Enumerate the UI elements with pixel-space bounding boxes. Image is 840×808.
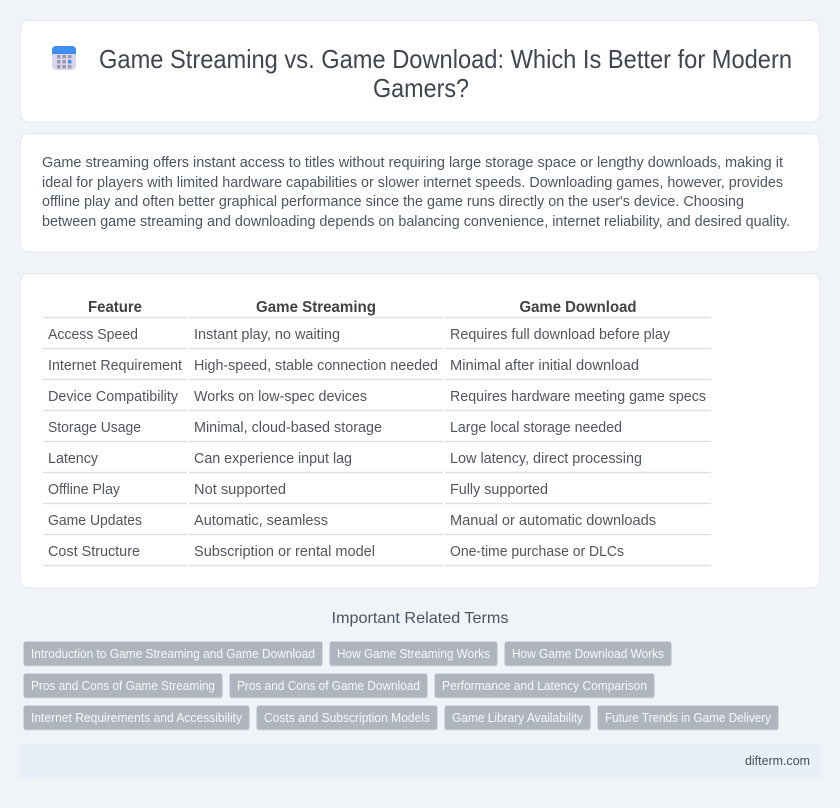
tag: Internet Requirements and Accessibility — [31, 710, 243, 725]
row: game updates — [48, 513, 656, 529]
row: latency — [48, 451, 642, 467]
panel: introduction text — [20, 134, 820, 252]
tag — [598, 706, 778, 730]
row: storage usage: Minimal, cloud-based storage — [194, 420, 382, 436]
row: offline play: Offline Play — [48, 482, 121, 498]
tag — [504, 642, 672, 666]
row: latency: Latency — [48, 451, 99, 467]
row: access speed: Access Speed — [48, 327, 138, 343]
title: Game Streaming vs. Game Download: Which Is Better for Modern — [99, 46, 792, 74]
row: cost structure: Cost Structure — [48, 544, 140, 560]
tag: How Game Download Works — [512, 646, 664, 661]
tag: Future Trends in Game Delivery — [605, 710, 772, 725]
tag: Pros and Cons of Game Download — [237, 678, 420, 693]
row: offline play: Not supported — [194, 482, 286, 498]
panel: introduction text: offline play and often better graphical performance since the game runs directly on the user's device. Choosing — [42, 194, 744, 210]
related term tags — [24, 642, 778, 730]
tag: Pros and Cons of Game Streaming — [31, 678, 215, 693]
row: device compatibility: Works on low-spec devices — [194, 389, 367, 405]
row: internet requirement: Minimal after initial download — [450, 358, 639, 374]
tag: Introduction to Game Streaming and Game Download — [31, 646, 315, 661]
heading: important related terms: Important Related Terms — [332, 610, 508, 627]
row: cost structure: One-time purchase or DLCs — [450, 544, 624, 560]
row: offline play — [48, 482, 548, 498]
panel: introduction text: between game streaming and downloading depends on balancing convenience, internet reliability, and desired quality. — [42, 214, 790, 230]
row: access speed — [48, 327, 671, 343]
tag — [330, 642, 498, 666]
row: internet requirement: High-speed, stable connection needed — [194, 358, 438, 374]
row: device compatibility: Requires hardware meeting game specs — [450, 389, 706, 405]
row: storage usage: Large local storage needed — [450, 420, 622, 436]
tag: Performance and Latency Comparison — [442, 678, 647, 693]
row: internet requirement — [48, 358, 639, 374]
footer bar — [20, 744, 820, 778]
panel: introduction text: Game streaming offers instant access to titles without requiring large storage space or lengthy downloads, making it — [42, 155, 783, 171]
row: offline play: Fully supported — [450, 482, 548, 498]
row: access speed: Instant play, no waiting — [194, 327, 340, 343]
tag — [24, 674, 222, 698]
row: game updates: Manual or automatic downloads — [450, 513, 656, 529]
row: game updates: Automatic, seamless — [194, 513, 328, 529]
tag — [434, 674, 654, 698]
footer bar: difterm.com — [745, 753, 810, 768]
icon: calendar grid — [52, 46, 76, 70]
title: Gamers? — [373, 75, 469, 103]
tag: Game Library Availability — [452, 710, 584, 725]
header panel — [20, 20, 820, 122]
table header: Feature — [88, 299, 142, 316]
table header — [88, 299, 636, 316]
row: game updates: Game Updates — [48, 513, 142, 529]
tag — [24, 706, 250, 730]
row: internet requirement: Internet Requirement — [48, 358, 182, 374]
row: storage usage — [48, 420, 622, 436]
row: cost structure: Subscription or rental model — [194, 544, 375, 560]
tag — [444, 706, 590, 730]
panel: introduction text: ideal for players with limited hardware capabilities or slower internet speeds. Downloading games, however, provides — [42, 175, 783, 191]
panel: comparison table — [20, 274, 820, 588]
table header: Game Download — [520, 299, 636, 316]
tag — [24, 642, 322, 666]
tag — [230, 674, 428, 698]
tag — [256, 706, 438, 730]
row: cost structure — [48, 544, 624, 560]
row: latency: Can experience input lag — [194, 451, 352, 467]
tag: How Game Streaming Works — [337, 646, 490, 661]
table header: Game Streaming — [256, 299, 376, 316]
tag: Costs and Subscription Models — [264, 710, 430, 725]
row: device compatibility: Device Compatibility — [48, 389, 179, 405]
title — [99, 46, 792, 103]
row: latency: Low latency, direct processing — [450, 451, 642, 467]
row: device compatibility — [48, 389, 706, 405]
row: access speed: Requires full download before play — [450, 327, 671, 343]
row: storage usage: Storage Usage — [48, 420, 141, 436]
